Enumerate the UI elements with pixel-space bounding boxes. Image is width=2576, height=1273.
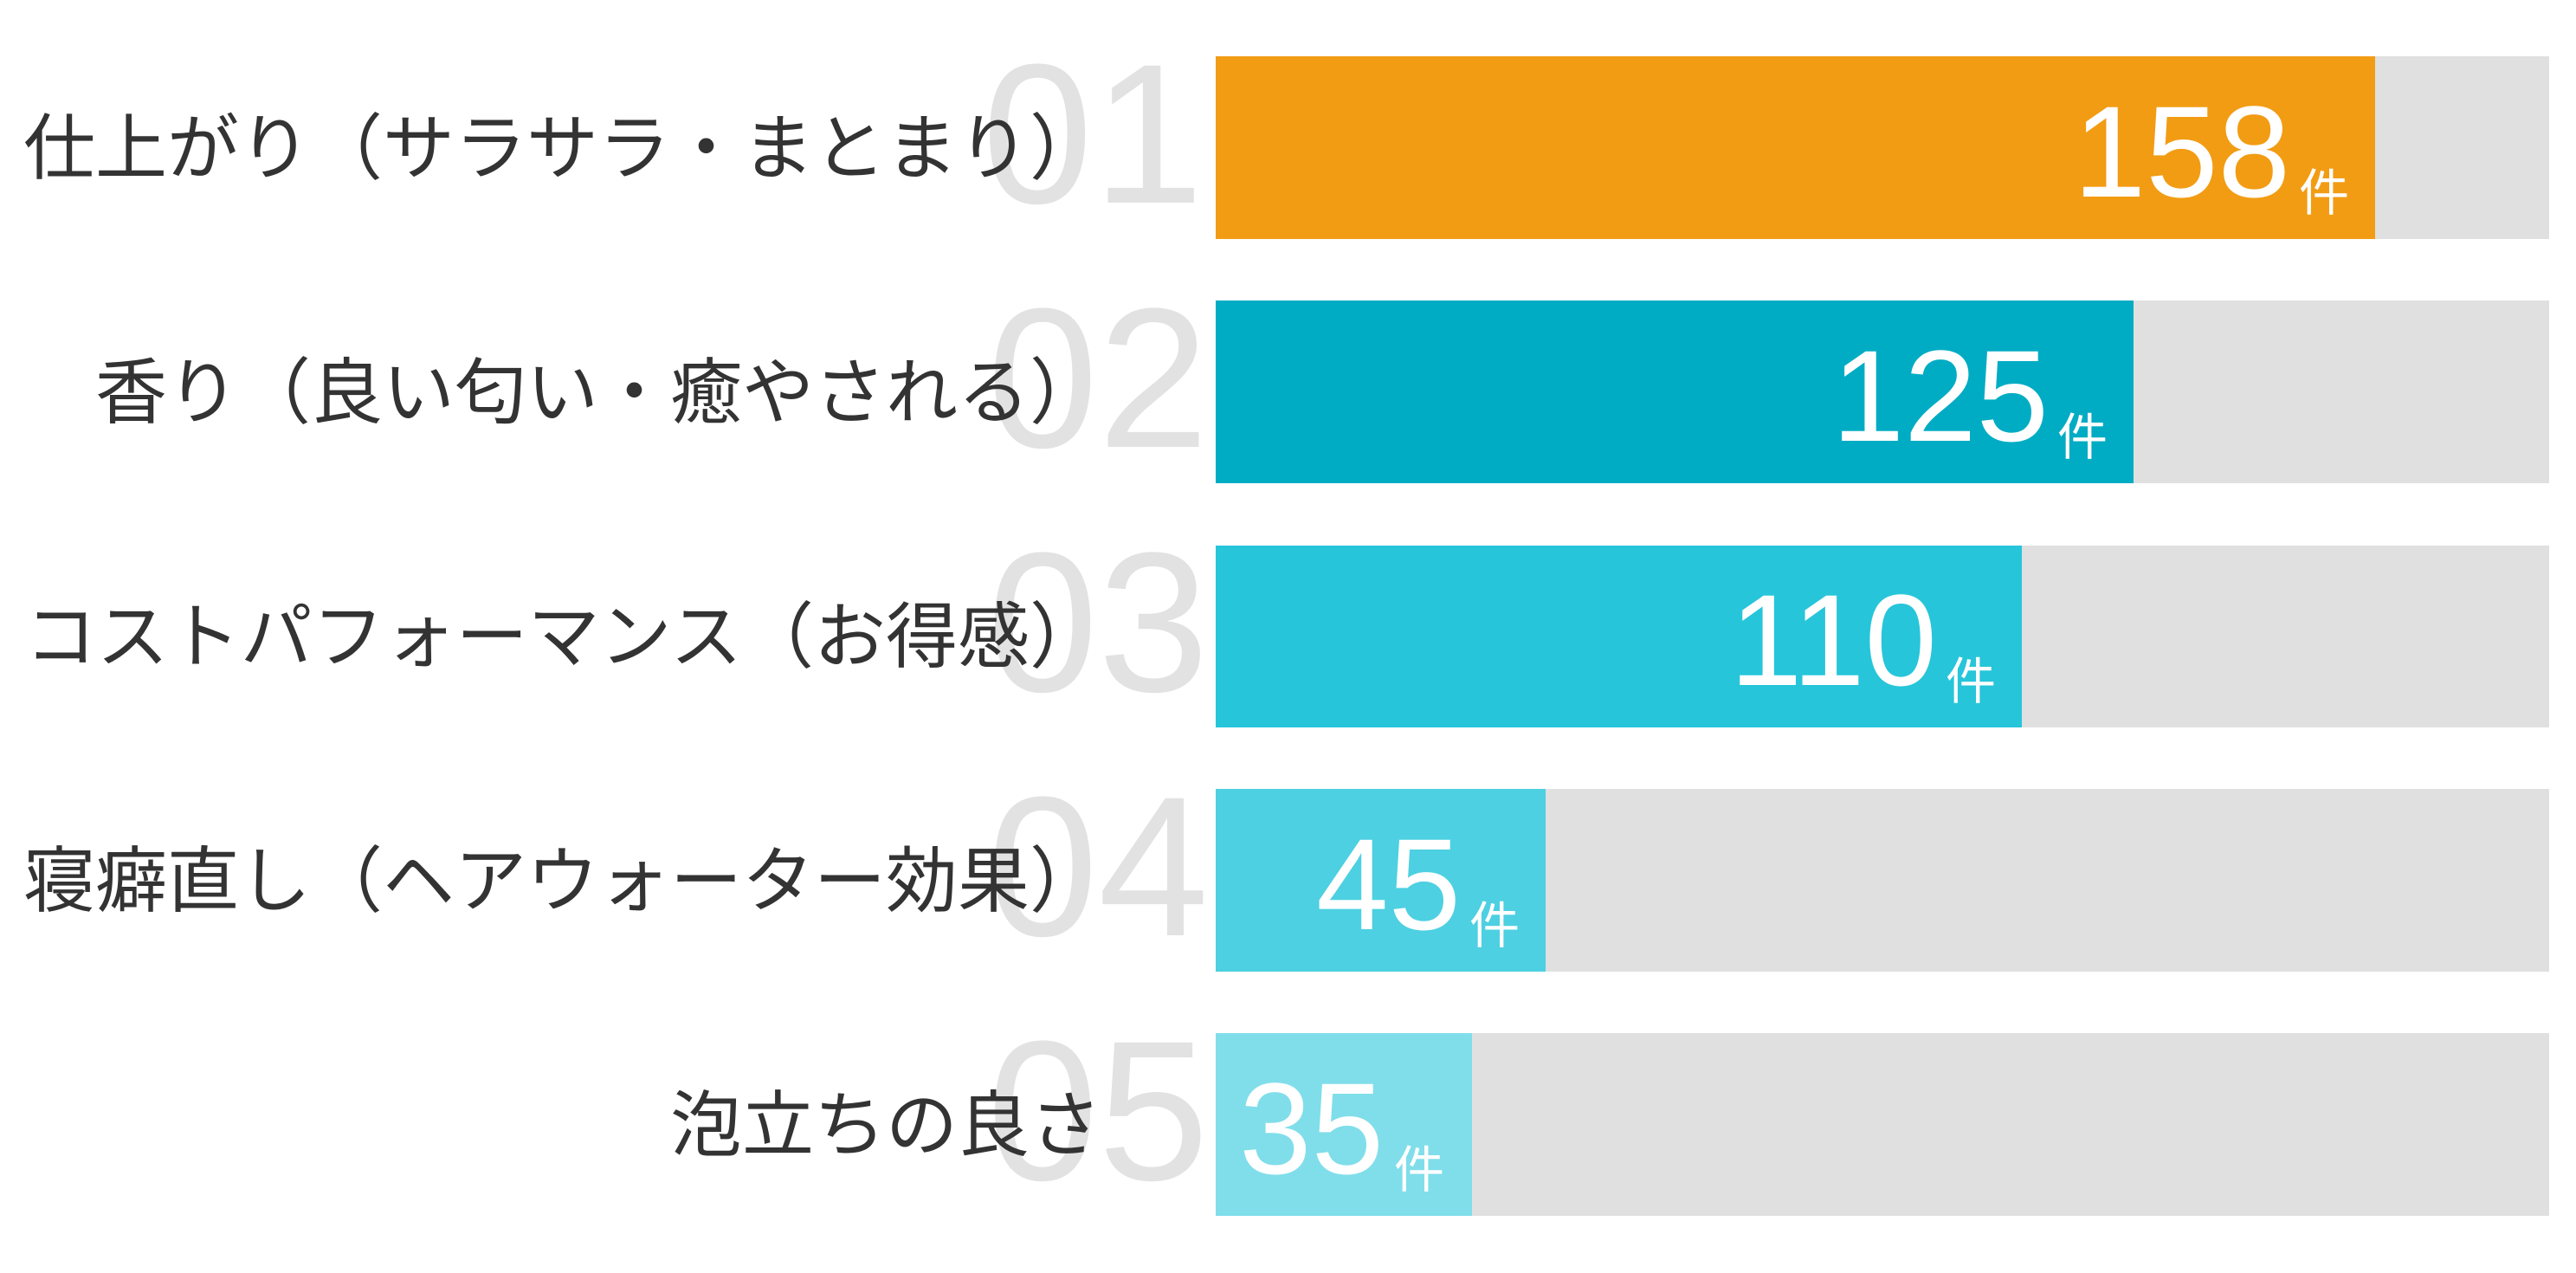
label 2: 香り（良い匂い・癒やされる）	[95, 352, 1101, 433]
value 1: 158	[2074, 79, 2290, 224]
row 4	[23, 755, 2549, 978]
big index 03: 03	[987, 511, 1209, 733]
row 3	[25, 511, 2549, 733]
label 4: 寝癖直し（ヘアウォーター効果）	[23, 841, 1101, 921]
row 1	[23, 23, 2549, 245]
value 4: 45	[1316, 811, 1461, 957]
value 3: 件	[1946, 654, 1996, 710]
value 2: 件	[2057, 410, 2108, 466]
label 3: コストパフォーマンス（お得感）	[25, 597, 1101, 677]
big index 02: 02	[987, 267, 1209, 489]
value 5: 35	[1239, 1056, 1384, 1201]
bar 4	[1216, 789, 2549, 972]
value 2: 125	[1832, 323, 2049, 468]
row 2	[95, 267, 2549, 489]
bar 2	[1216, 300, 2549, 483]
big index 05: 05	[987, 999, 1209, 1222]
row 5	[670, 999, 2549, 1222]
big index 04: 04	[987, 755, 1209, 978]
label 1: 仕上がり（サラサラ・まとまり）	[23, 108, 1101, 189]
value 1: 件	[2299, 165, 2349, 222]
value 4: 件	[1469, 898, 1520, 954]
label 5: 泡立ちの良さ	[670, 1085, 1101, 1166]
bar 1	[1216, 56, 2549, 239]
bar 5	[1216, 1033, 2549, 1216]
value 5: 件	[1394, 1142, 1444, 1199]
value 3: 110	[1730, 567, 1937, 713]
bar 3	[1216, 546, 2549, 727]
big index 01: 01	[982, 23, 1204, 245]
